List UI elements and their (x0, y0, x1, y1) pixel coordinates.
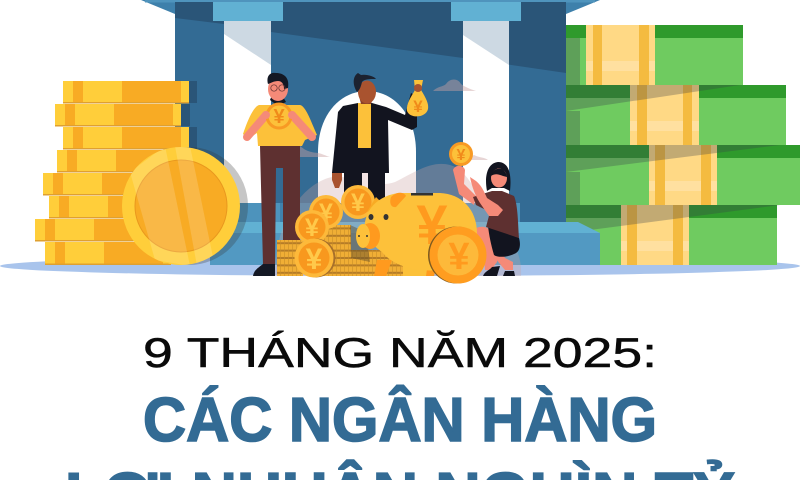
coin bar 3 (63, 127, 189, 150)
body (364, 193, 477, 270)
ear (390, 193, 406, 207)
translucent hill (275, 164, 521, 276)
coin: ¥ (319, 199, 333, 227)
hand (332, 172, 342, 188)
bank shadow on money (566, 38, 780, 230)
head (486, 162, 510, 191)
slot (411, 193, 433, 196)
coin stack (35, 81, 197, 265)
top (473, 191, 519, 238)
heading: main line 1: CÁC NGÂN HÀNG (143, 386, 657, 455)
arched doorway (318, 91, 416, 205)
money brick 2 (566, 85, 786, 145)
pointing arm (470, 177, 503, 216)
stacked small coins (277, 225, 403, 276)
clouds (300, 80, 488, 160)
roof (141, 0, 600, 30)
coin bar 1 (63, 81, 189, 104)
neck and head (267, 73, 288, 106)
left column (213, 2, 283, 203)
skirt (488, 226, 520, 257)
money bag: ¥ (413, 97, 423, 116)
legs (260, 146, 300, 265)
coin bar 2 (55, 104, 181, 126)
money stacks (566, 25, 800, 265)
raised coin: ¥ (457, 147, 466, 164)
shoes (483, 266, 515, 276)
money brick 4 (566, 205, 777, 265)
man with coin (243, 73, 317, 276)
legs (344, 170, 385, 205)
coin bar 6 (49, 196, 175, 218)
base steps (210, 203, 600, 265)
eyes (368, 214, 388, 220)
coin bar 4 (57, 150, 183, 172)
shoe (253, 264, 275, 276)
coin: ¥ (305, 214, 319, 242)
shirt (243, 105, 317, 146)
raised arm (453, 166, 476, 205)
coin: ¥ (306, 243, 323, 276)
woman with coin (449, 142, 520, 276)
heading: date line: 9 THÁNG NĂM 2025: (143, 329, 657, 376)
snout (356, 223, 380, 249)
coin held: ¥ (273, 106, 285, 128)
head (354, 73, 376, 104)
coin bar 8 (45, 242, 171, 265)
coin bar 5 (43, 173, 169, 196)
bank building (141, 0, 600, 276)
right column (451, 2, 521, 203)
big coin (122, 146, 248, 266)
legs (374, 260, 438, 276)
shirt (358, 103, 371, 148)
walls (175, 2, 566, 227)
yen mark: ¥ (416, 193, 448, 256)
stack shadow (181, 81, 197, 149)
forearms (247, 115, 312, 137)
money brick 3 (566, 145, 800, 205)
jacket (332, 93, 417, 173)
back ear (367, 197, 384, 212)
coin: ¥ (351, 189, 365, 217)
man in suit with money bag (332, 73, 428, 205)
legs (476, 227, 513, 270)
front coin: ¥ (448, 236, 470, 278)
piggy bank (356, 193, 486, 284)
money brick 1 (566, 25, 743, 85)
ground shadow (0, 256, 800, 276)
coin bar 7 (35, 219, 161, 242)
yen coins pile (294, 185, 375, 278)
coin held (262, 102, 296, 130)
